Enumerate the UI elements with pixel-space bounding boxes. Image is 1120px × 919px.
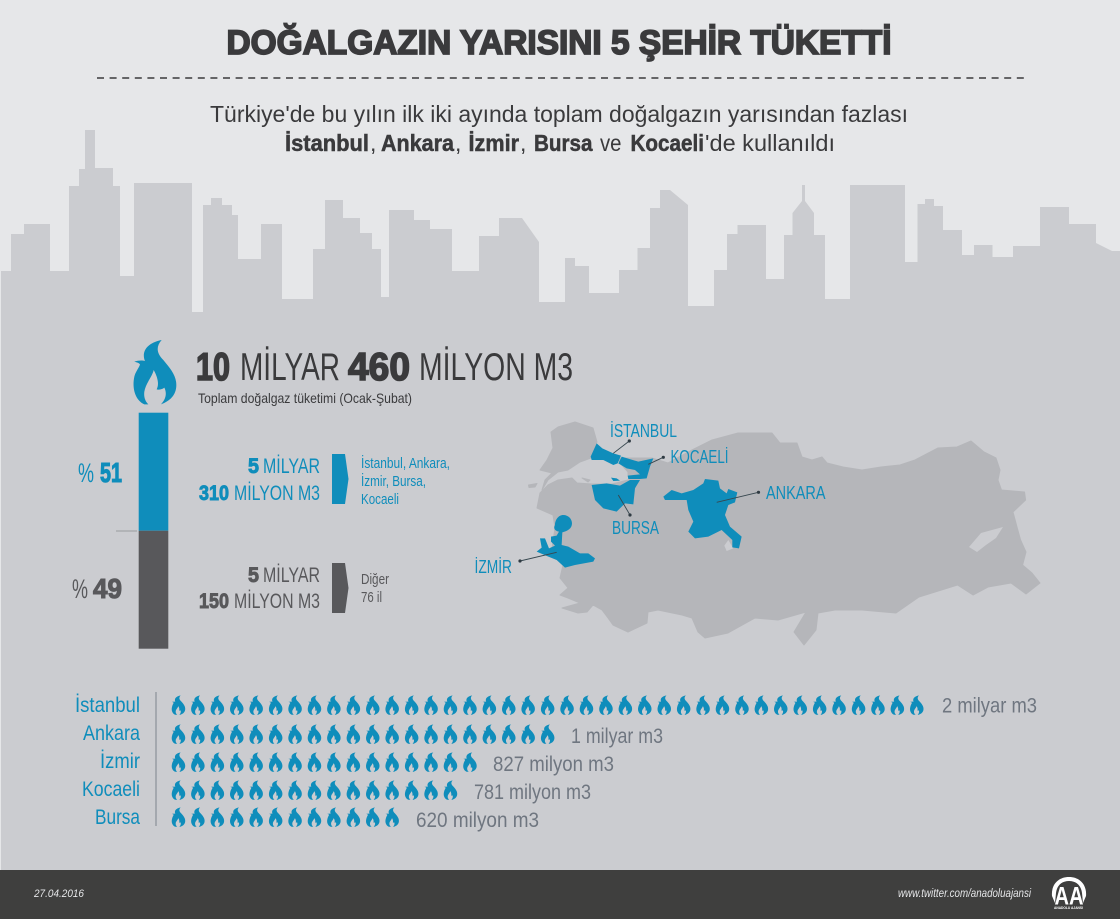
total consumption heading: Toplam doğalgaz tüketimi (Ocak-Şubat) xyxy=(198,390,412,406)
figure: 5 milyar 150 milyon xyxy=(199,564,320,613)
value labels: 827 milyon m3 xyxy=(493,753,614,776)
pictogram row: İzmir xyxy=(172,752,477,772)
figure: 5 milyar 310 milyon xyxy=(199,455,320,505)
map: lake Van xyxy=(969,527,1003,552)
subtitle: Bursa xyxy=(534,130,593,156)
total consumption heading: 460 xyxy=(348,346,410,389)
cities list: İzmir, Bursa, xyxy=(361,472,426,490)
value labels: 1 milyar m3 xyxy=(571,725,663,748)
figure: 5 milyar 150 milyon: MİLYAR xyxy=(263,564,320,587)
figure: 5 milyar 310 milyon: MİLYON M3 xyxy=(234,482,320,505)
total consumption heading: MİLYON M3 xyxy=(419,346,573,389)
city labels: Kocaeli xyxy=(82,778,140,801)
city labels: İzmir xyxy=(100,750,140,773)
map labels: KOCAELİ xyxy=(670,446,728,467)
label: 49 percent: % xyxy=(72,574,88,604)
stacked bar: 51 / 49 percent xyxy=(116,413,168,649)
footer xyxy=(0,870,1120,919)
label: 49 percent: 49 xyxy=(93,573,122,604)
region: Ankara xyxy=(663,479,742,548)
label: 51 percent xyxy=(78,457,122,488)
total consumption heading: 10 xyxy=(196,346,230,389)
subtitle: Ankara xyxy=(381,130,454,156)
region: İstanbul xyxy=(591,443,621,465)
map of Turkey xyxy=(518,422,1040,645)
social link: www.twitter.com/anadoluajansi xyxy=(898,888,1031,900)
value labels: 781 milyon m3 xyxy=(474,781,591,804)
subtitle xyxy=(210,101,908,156)
pictogram row: Bursa xyxy=(172,807,399,827)
leader lines xyxy=(518,439,760,563)
date: 27.04.2016 xyxy=(33,888,85,900)
label: 51 percent: % xyxy=(78,458,94,488)
city labels: Bursa xyxy=(95,806,140,829)
city labels: Ankara xyxy=(83,722,140,745)
total consumption heading xyxy=(196,346,573,406)
subtitle: , xyxy=(455,130,461,156)
figure: 5 milyar 310 milyon: MİLYAR xyxy=(263,455,320,478)
label: 49 percent xyxy=(72,573,122,604)
figure: 5 milyar 150 milyon: MİLYON M3 xyxy=(234,590,320,613)
label: 51 percent: 51 xyxy=(100,457,122,488)
pictogram row: Ankara xyxy=(172,724,554,744)
logo: Anadolu Agency: AA xyxy=(1054,882,1084,910)
map labels: İZMİR xyxy=(474,556,512,577)
subtitle: 'de kullanıldı xyxy=(705,130,835,156)
subtitle: , xyxy=(370,130,376,156)
cities list xyxy=(361,454,450,508)
figure: 5 milyar 310 milyon: 5 xyxy=(248,455,259,478)
value labels: 2 milyar m3 xyxy=(942,694,1037,718)
value labels: 620 milyon m3 xyxy=(416,809,539,832)
icon: large flame xyxy=(134,340,176,404)
map labels: İSTANBUL xyxy=(610,420,677,441)
other provinces xyxy=(361,571,389,606)
subtitle: İzmir xyxy=(468,130,519,156)
subtitle: Türkiye'de bu yılın ilk iki ayında toplam doğalgazın yarısından fazlası xyxy=(210,101,908,127)
pictogram row: İstanbul xyxy=(172,695,924,715)
city labels: İstanbul xyxy=(75,694,140,717)
logo: Anadolu Agency: ANADOLU AJANSI xyxy=(1054,906,1083,910)
value labels xyxy=(416,694,1037,832)
total consumption heading: MİLYAR xyxy=(240,346,340,389)
other provinces: Diğer xyxy=(361,571,389,588)
arrow: dark xyxy=(332,563,348,613)
cities list: İstanbul, Ankara, xyxy=(361,454,450,472)
map: Tuz lake xyxy=(724,540,733,551)
city labels xyxy=(75,694,140,829)
subtitle: İstanbul xyxy=(285,130,369,156)
region: Kocaeli xyxy=(618,457,653,479)
figure: 5 milyar 150 milyon: 5 xyxy=(248,564,259,587)
arrow: blue xyxy=(332,454,348,504)
subtitle: , xyxy=(520,130,526,156)
region: Bursa xyxy=(592,478,640,512)
other provinces: 76 il xyxy=(361,589,382,606)
subtitle: ve xyxy=(600,130,622,156)
region: İzmir xyxy=(537,515,595,568)
map labels xyxy=(474,420,826,577)
map: land xyxy=(528,422,1040,645)
cities list: Kocaeli xyxy=(361,491,399,508)
logo: Anadolu Agency xyxy=(1052,877,1086,910)
map labels: BURSA xyxy=(612,517,659,538)
figure: 5 milyar 310 milyon: 310 xyxy=(199,482,229,505)
title: DOĞALGAZIN YARISINI 5 ŞEHİR TÜKETTİ xyxy=(226,24,892,62)
pictogram row: Kocaeli xyxy=(172,780,457,800)
figure: 5 milyar 150 milyon: 150 xyxy=(199,590,229,613)
subtitle: Kocaeli xyxy=(630,130,704,156)
map labels: ANKARA xyxy=(766,482,826,503)
